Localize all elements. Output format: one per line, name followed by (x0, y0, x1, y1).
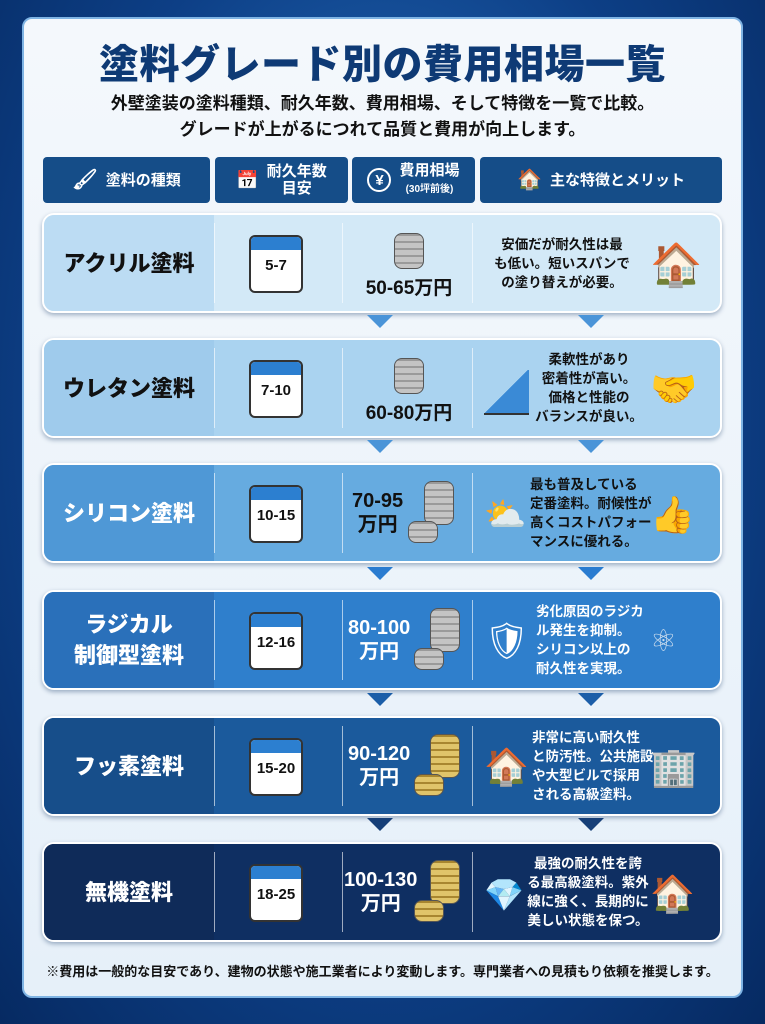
subtitle (111, 94, 654, 139)
row: fluorine (42, 716, 722, 816)
row: fluorine: 万円 (359, 767, 399, 789)
row: radical: 12-16 (257, 634, 295, 651)
row: silicone: 最も普及している (530, 477, 638, 492)
subtitle: 外壁塗装の塗料種類、耐久年数、費用相場、そして特徴を一覧で比較。 (111, 94, 654, 113)
row: radical: 🛡 (484, 620, 530, 661)
row: silicone: マンスに優れる。 (530, 534, 638, 549)
row: silicone: 高くコストパフォー (530, 515, 652, 530)
header: cost: ¥ (375, 172, 384, 188)
row: silicone: 👍 (650, 494, 695, 535)
row: radical: ル発生を抑制。 (536, 623, 630, 638)
row: inorganic: 線に強く、長期的に (527, 894, 649, 909)
header: years: 📅 (236, 170, 259, 190)
row: inorganic (42, 842, 722, 942)
header: cost (352, 157, 475, 203)
row: urethane: バランスが良い。 (535, 409, 643, 424)
row: fluorine: 🏠 (484, 746, 529, 787)
row: radical: 劣化原因のラジカ (536, 604, 644, 619)
row: silicone: 定番塗料。耐候性が (530, 496, 652, 511)
row: urethane: 🤝 (650, 369, 697, 411)
row: inorganic: 🏠 (650, 873, 695, 914)
row: urethane (42, 338, 722, 438)
row: inorganic: 無機塗料 (85, 880, 173, 904)
row: radical: 耐久性を実現。 (536, 661, 630, 676)
row: silicone: 70-95 (352, 490, 403, 512)
row: inorganic: 18-25 (257, 886, 295, 903)
row: acrylic: 安価だが耐久性は最 (501, 236, 623, 252)
header: type: 🖌 (72, 168, 98, 190)
row: radical (42, 590, 722, 690)
row: silicone (42, 463, 722, 563)
row: urethane: 価格と性能の (548, 390, 629, 405)
header: cost: 費用相場 (399, 162, 460, 179)
header row (43, 157, 722, 203)
row: silicone: 万円 (358, 514, 398, 536)
row: radical: ラジカル (85, 612, 173, 637)
row: acrylic: 🏠 (650, 241, 702, 288)
row: silicone: シリコン塗料 (63, 500, 195, 526)
header: type: 塗料の種類 (106, 172, 181, 188)
row: inorganic: 💎 (484, 877, 524, 913)
row: acrylic: 5-7 (265, 257, 287, 274)
row: fluorine: や大型ビルで採用 (532, 768, 640, 783)
header: years: 耐久年数 (267, 163, 327, 180)
row: radical: 万円 (359, 641, 399, 663)
row: radical: ⚛ (650, 625, 677, 658)
row: inorganic: 100-130 (344, 869, 417, 891)
footnote: ※費用は一般的な目安であり、建物の状態や施工業者により変動します。専門業者への見積もり依頼を推奨します。 (46, 964, 719, 979)
row: fluorine: フッ素塗料 (74, 754, 184, 778)
row: fluorine: 90-120 (348, 743, 410, 765)
header: features: 主な特徴とメリット (550, 172, 685, 188)
header: features: 🏠 (517, 168, 542, 190)
row: acrylic: も低い。短いスパンで (494, 256, 630, 270)
row: urethane: 密着性が高い。 (542, 371, 636, 386)
row: urethane: 7-10 (261, 382, 291, 399)
header: cost: (30坪前後) (406, 184, 453, 195)
row: fluorine: 🏢 (650, 747, 697, 789)
header: features (480, 157, 722, 203)
row: acrylic (42, 213, 722, 313)
row: inorganic: 万円 (361, 893, 401, 915)
row: urethane: 柔軟性があり (548, 352, 629, 367)
row: inorganic: 最強の耐久性を誇 (534, 856, 642, 871)
row: radical: 制御型塗料 (74, 643, 184, 668)
subtitle: グレードが上がるにつれて品質と費用が向上します。 (180, 120, 585, 139)
row: fluorine: と防汚性。公共施設 (532, 749, 654, 764)
arrows (367, 315, 393, 328)
row: urethane: ウレタン塗料 (63, 376, 195, 400)
row: fluorine: 非常に高い耐久性 (532, 730, 640, 745)
row: acrylic: の塗り替えが必要。 (501, 274, 623, 290)
row: radical: 80-100 (348, 617, 410, 639)
row: inorganic: る最高級塗料。紫外 (527, 875, 649, 890)
row: inorganic: 美しい状態を保つ。 (528, 913, 648, 928)
header: years (215, 157, 348, 203)
row: urethane: 60-80万円 (366, 403, 452, 424)
header: type (43, 157, 210, 203)
row: fluorine: される高級塗料。 (532, 787, 640, 802)
row: acrylic: アクリル塗料 (64, 250, 194, 276)
title: 塗料グレード別の費用相場一覧 (99, 43, 666, 87)
row: radical: シリコン以上の (536, 642, 630, 657)
row: silicone: ⛅ (484, 496, 526, 534)
row: silicone: 10-15 (257, 507, 295, 524)
header: years: 目安 (282, 180, 312, 197)
row: fluorine: 15-20 (257, 760, 295, 777)
row: acrylic: 50-65万円 (366, 278, 452, 299)
